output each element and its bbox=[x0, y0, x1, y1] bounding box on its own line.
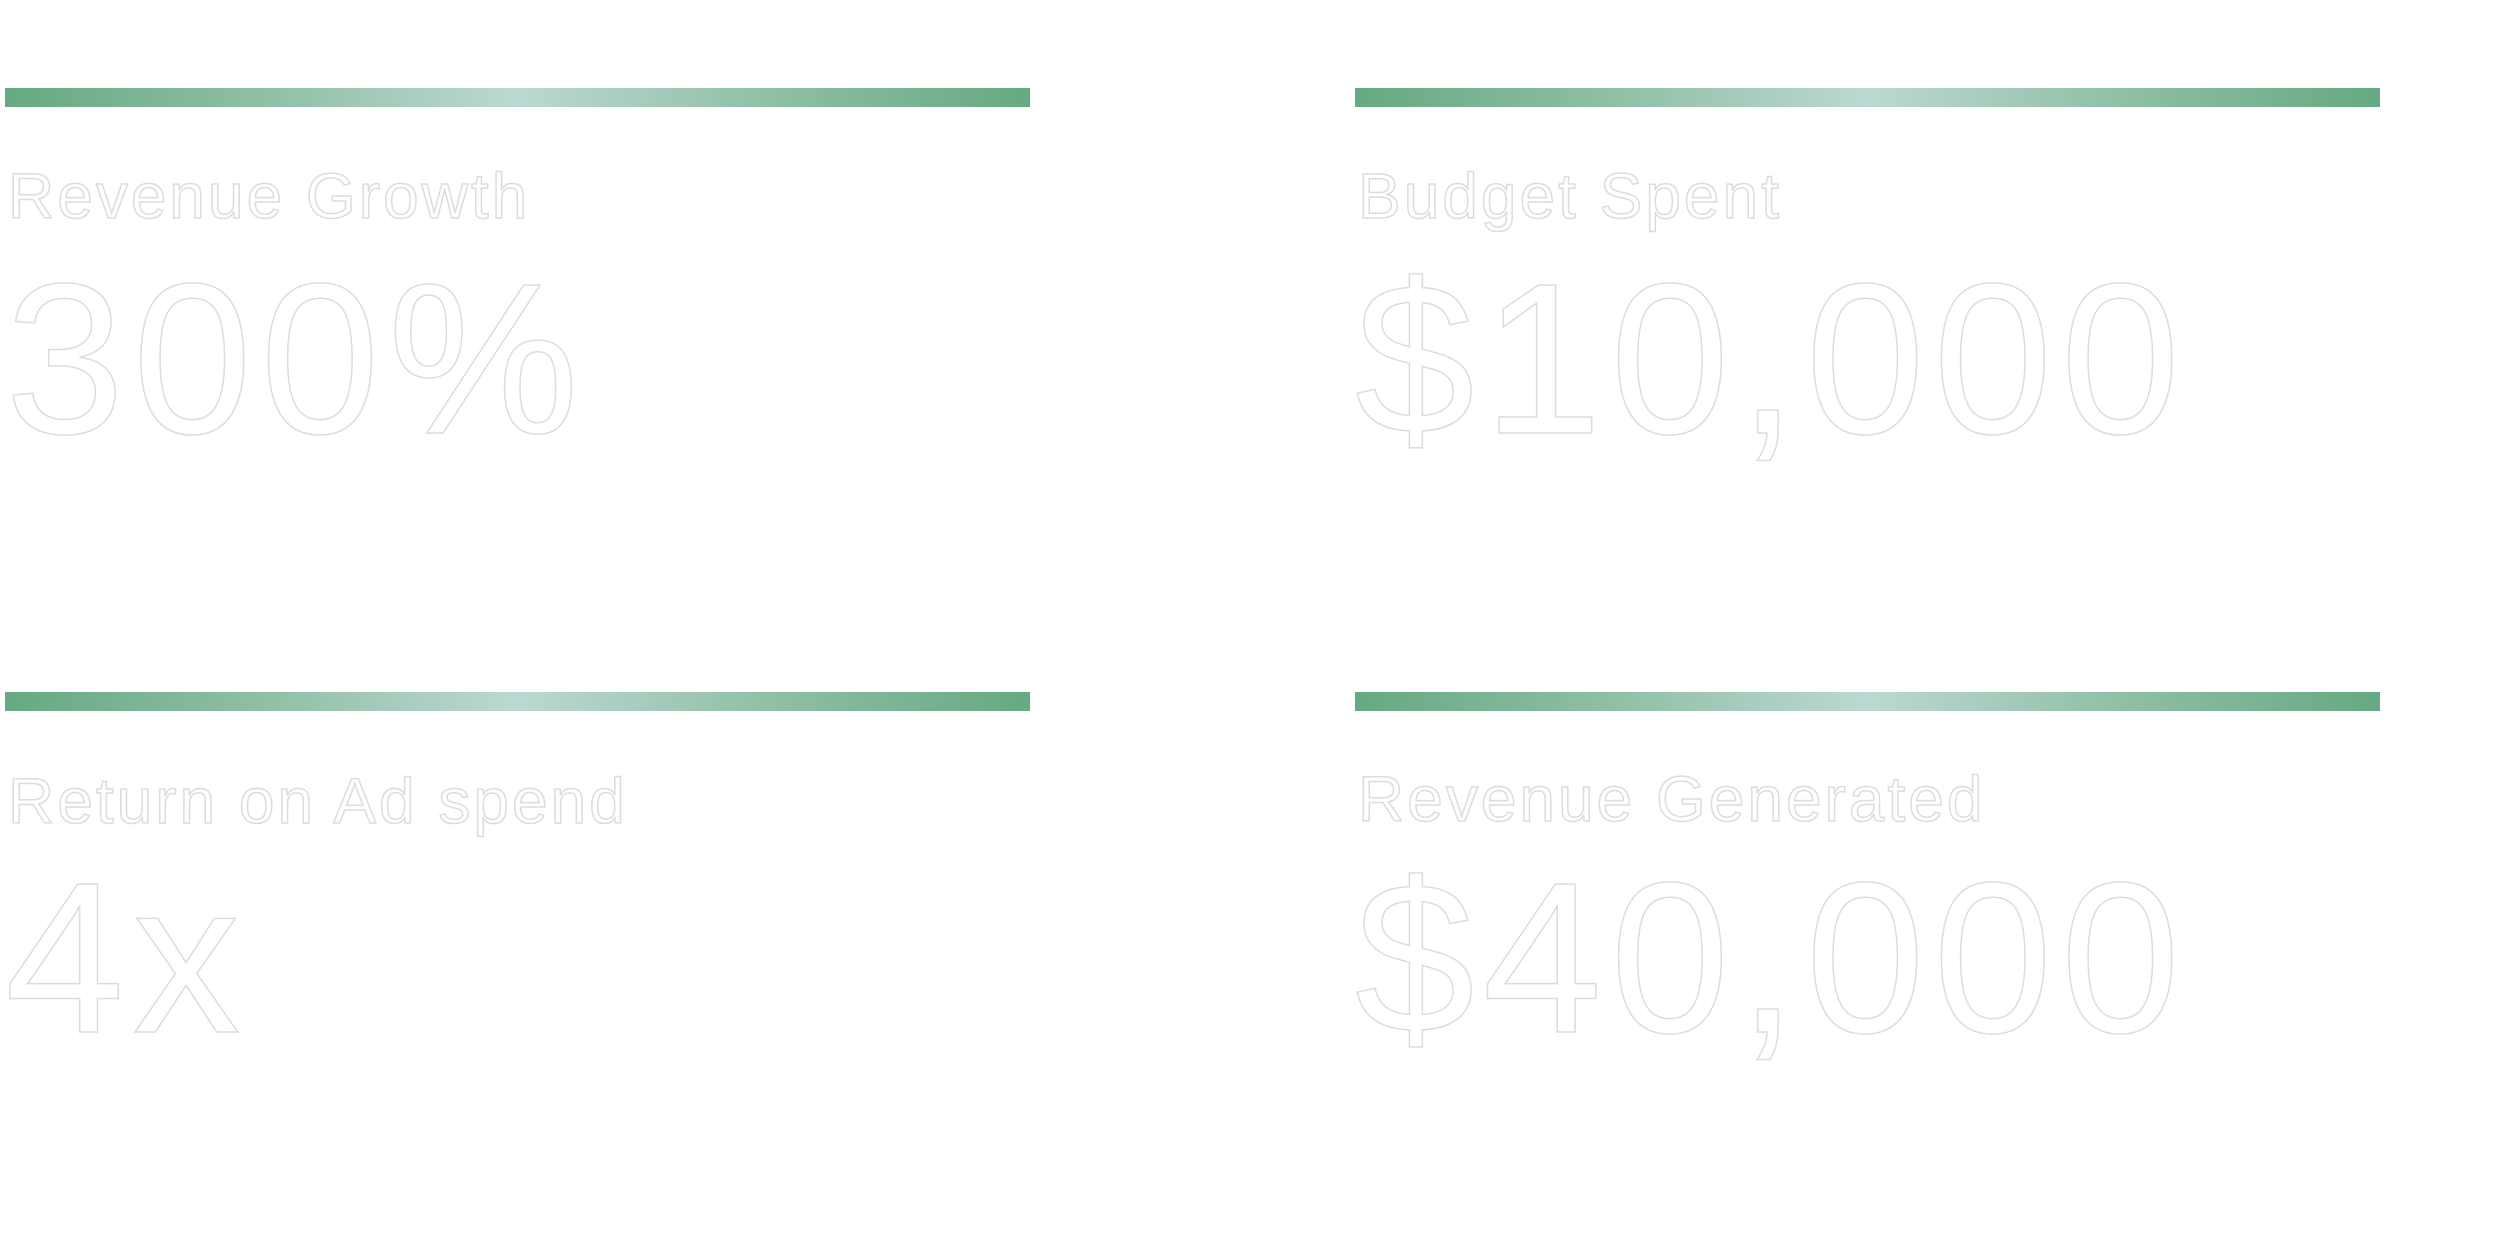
panel: revenue generated bbox=[1355, 692, 2380, 1078]
panel: budget spent bbox=[1355, 88, 2380, 479]
heading: return on ad spend: Return on Ad spend bbox=[8, 765, 628, 837]
heading: revenue growth: Revenue Growth bbox=[8, 160, 530, 232]
number: $10,000: $10,000 bbox=[1355, 238, 2188, 479]
number: 300%: 300% bbox=[5, 238, 587, 479]
number: $40,000: $40,000 bbox=[1355, 837, 2188, 1078]
panel: revenue growth bbox=[5, 88, 1030, 479]
panel: return on ad spend bbox=[5, 692, 1030, 1078]
heading: revenue generated: Revenue Generated bbox=[1358, 763, 1985, 835]
number: 4x: 4x bbox=[5, 837, 248, 1078]
heading: budget spent: Budget Spent bbox=[1358, 160, 1782, 232]
